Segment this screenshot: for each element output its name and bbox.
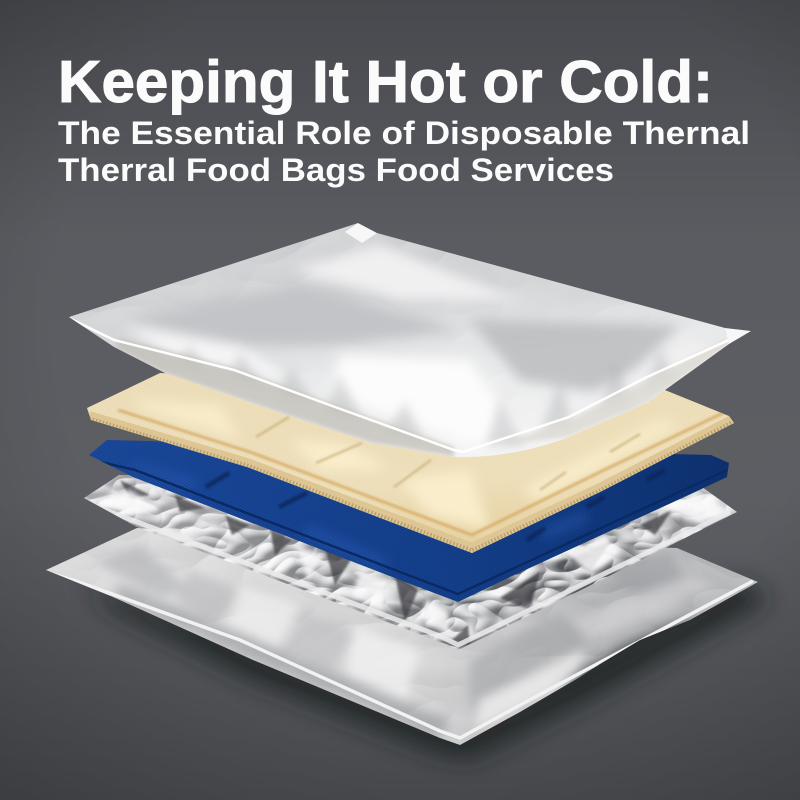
pouch underside shadow (113, 585, 700, 738)
bag: bottom white pouch (40, 520, 765, 750)
top pouch belly shade (114, 338, 729, 457)
top pouch front wrinkles (180, 345, 676, 445)
top pouch crumple texture (65, 220, 755, 460)
subtitle line 2: Therral Food Bags Food Services (58, 152, 614, 188)
pad stitched edge (89, 416, 732, 548)
foil highlights (95, 490, 732, 635)
layer: blue quilted fabric (89, 440, 729, 602)
layer: cream insulation pad (80, 370, 740, 560)
pad seams (118, 410, 725, 535)
top pouch corners (345, 223, 751, 344)
drop shadow under stack (85, 580, 770, 760)
pad quilt pillows (130, 400, 680, 530)
bag: top white translucent pouch (65, 220, 755, 460)
foil crumple texture (80, 470, 740, 655)
pouch crumple texture (192, 551, 711, 687)
top pouch seam (69, 318, 729, 452)
foil bright lower rim (92, 505, 730, 645)
heading: Keeping It Hot or Cold: (58, 49, 713, 115)
fabric lower hem (92, 460, 727, 594)
foil dark creases (120, 480, 672, 645)
title block (58, 49, 750, 188)
subtitle line 1: The Essential Role of Disposable Thernal (58, 115, 750, 151)
pouch front seam (46, 572, 753, 738)
layer: aluminium foil (80, 470, 740, 655)
fabric pillow highlights (130, 460, 590, 570)
fabric quilt seams (206, 470, 665, 540)
top pouch soft light and shade (120, 245, 710, 445)
pouch soft folds (95, 545, 720, 730)
